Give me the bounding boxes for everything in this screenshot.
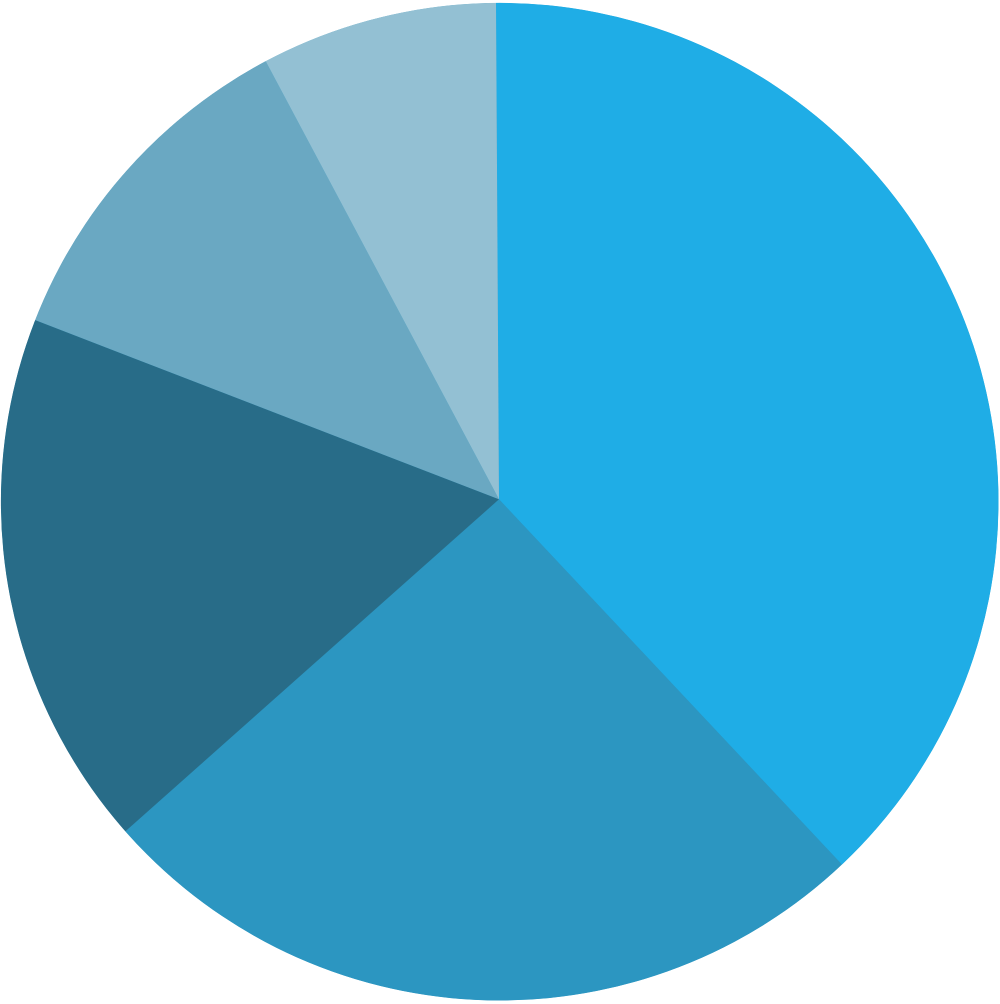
slice: muted light blue [35,61,499,500]
slice: second largest, medium blue [126,502,842,1000]
slice: largest, bright blue [496,2,998,864]
slice: smallest, pale blue [266,2,499,499]
slice: dark teal [0,320,499,832]
